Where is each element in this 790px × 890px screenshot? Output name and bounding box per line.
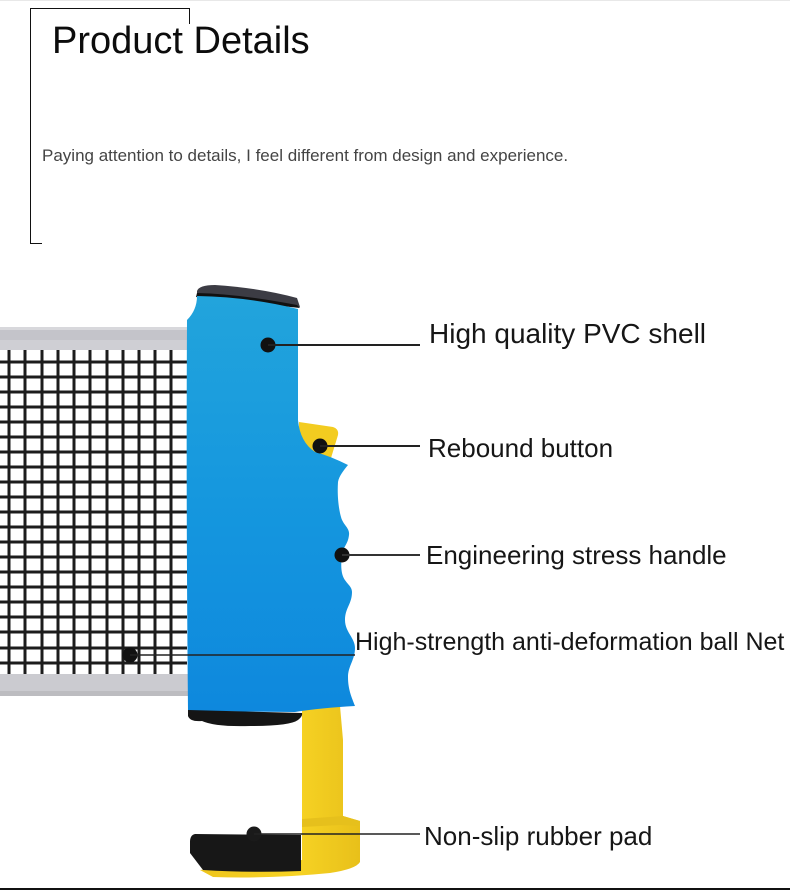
label: pad: Non-slip rubber pad <box>424 821 652 851</box>
rebound button <box>299 422 338 458</box>
callout: pad <box>246 826 420 842</box>
top edge strip <box>0 0 790 1</box>
blue handle <box>187 296 355 712</box>
rubber pad <box>190 834 301 872</box>
yellow pole and foot <box>200 706 360 878</box>
bottom edge line <box>0 888 790 890</box>
net bands <box>0 327 190 696</box>
title frame <box>30 8 190 244</box>
label: net: High-strength anti-deformation ball Net <box>355 628 784 656</box>
callout: shell <box>260 338 420 352</box>
black cap <box>197 285 300 307</box>
net mesh <box>0 350 187 674</box>
label: handle: Engineering stress handle <box>426 540 727 570</box>
callout: button <box>312 438 420 454</box>
label: shell: High quality PVC shell <box>429 318 706 349</box>
label: button: Rebound button <box>428 433 613 463</box>
subtitle: Paying attention to details, I feel different from design and experience. <box>42 146 568 165</box>
title: Product Details <box>52 20 310 62</box>
callout: handle <box>334 548 420 562</box>
black grip base <box>188 710 302 726</box>
callout: net <box>122 648 355 662</box>
